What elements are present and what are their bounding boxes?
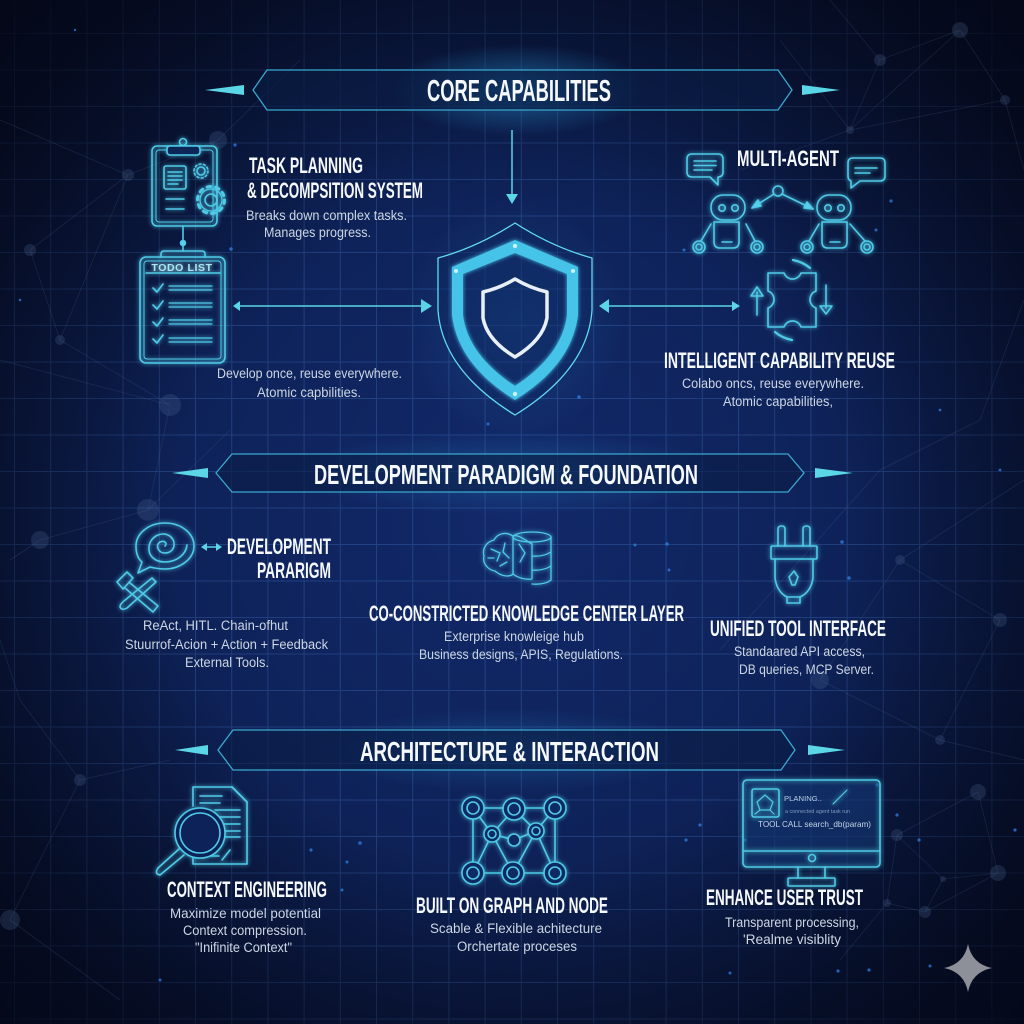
panel: multi-agent and capability reuse — [664, 146, 895, 409]
section header: Core Capabilities: CORE CAPABILITIES — [427, 73, 611, 108]
section header: Development Paradigm & Foundation: DEVELOPMENT PARADIGM & FOUNDATION — [314, 459, 698, 490]
text: paradigm description line 1: ReAct, HITL. Chain-ofhut — [143, 618, 288, 633]
icon: monitor — [743, 780, 880, 886]
section header: Architecture & Interaction — [175, 708, 845, 792]
text: reuse description line 1: Colabo oncs, reuse everywhere. — [682, 376, 864, 391]
text: reuse description line 2: Atomic capabilities, — [723, 394, 833, 409]
text: trust description line 2: 'Realme visiblity — [743, 932, 841, 947]
icon: two robots — [687, 154, 885, 253]
text: paradigm description line 2: Stuurrof-Acion + Action + Feedback — [125, 637, 328, 652]
heading: context engineering: CONTEXT ENGINEERING — [167, 877, 327, 902]
icon: planning clipboard — [152, 138, 224, 226]
icon: document and magnifier — [156, 787, 247, 875]
arrow: paradigm double arrow — [201, 543, 222, 551]
heading: unified tool interface: UNIFIED TOOL INTERFACE — [710, 616, 886, 641]
text: task description line 2: Manages progress. — [264, 225, 371, 240]
heading: intelligent capability reuse: INTELLIGENT CAPABILITY REUSE — [664, 348, 895, 373]
panel: user trust — [706, 780, 880, 947]
text: context description line 1: Maximize model potential — [170, 906, 321, 921]
arrow: header down to shield — [506, 130, 518, 204]
heading: decomposition system: & DECOMPSITION SYSTEM — [247, 178, 423, 203]
icon: central shield — [405, 200, 625, 440]
text: tool description line 1: Standaared API access, — [734, 644, 865, 659]
icon: todo list: TODO LIST — [151, 262, 213, 274]
heading: enhance user trust: ENHANCE USER TRUST — [706, 885, 863, 910]
heading: paradigm: PARARIGM — [257, 558, 331, 583]
heading: built on graph and node: BUILT ON GRAPH AND NODE — [416, 893, 608, 918]
text: reuse note line 1: Develop once, reuse everywhere. — [217, 366, 402, 381]
icon: todo list — [140, 251, 225, 363]
icon: puzzle piece with cycle arrows — [751, 260, 832, 340]
panel: task planning — [140, 138, 423, 400]
heading: knowledge center layer: CO-CONSTRICTED KNOWLEDGE CENTER LAYER — [369, 601, 684, 626]
panel: context engineering — [156, 787, 327, 955]
icon: monitor: TOOL CALL search_db(param) — [758, 819, 871, 829]
text: knowledge description line 1: Exterprise knowleige hub — [444, 629, 584, 644]
icon: monitor: PLANING.. — [784, 794, 822, 803]
icon: monitor: a connected agent task run — [785, 809, 850, 815]
panel: development paradigm — [117, 523, 331, 670]
icon: spiral bubble and tools — [117, 523, 194, 612]
heading: development: DEVELOPMENT — [227, 534, 331, 559]
text: graph description line 2: Orchertate proceses — [457, 939, 577, 954]
section header: Development Paradigm & Foundation — [172, 431, 853, 515]
heading: multi-agent: MULTI-AGENT — [737, 146, 839, 171]
panel: graph and node — [416, 797, 608, 954]
icon: plug — [771, 526, 817, 603]
text: context description line 2: Context compression. — [183, 923, 307, 938]
section header: Architecture & Interaction: ARCHITECTURE & INTERACTION — [360, 736, 659, 767]
text: context description line 3: "Inifinite Context" — [195, 940, 292, 955]
arrow: todo to shield — [233, 299, 432, 313]
icon: brain and database — [483, 532, 551, 584]
text: trust description line 1: Transparent processing, — [725, 915, 859, 930]
panel: knowledge center — [369, 532, 684, 662]
heading: task planning: TASK PLANNING — [249, 153, 363, 178]
icon: sparkle watermark — [944, 944, 992, 992]
icon: connector — [180, 226, 186, 251]
arrow: shield to capability reuse — [599, 299, 740, 313]
text: knowledge description line 2: Business designs, APIS, Regulations. — [419, 647, 623, 662]
text: paradigm description line 3: External Tools. — [185, 655, 269, 670]
icon: node graph — [462, 797, 566, 884]
text: reuse note line 2: Atomic capbilities. — [257, 385, 361, 400]
text: graph description line 1: Scable & Flexible achitecture — [430, 921, 602, 936]
section header: Core Capabilities — [205, 44, 840, 136]
text: task description line 1: Breaks down complex tasks. — [246, 208, 407, 223]
panel: unified tool interface — [710, 526, 886, 677]
text: tool description line 2: DB queries, MCP Server. — [739, 662, 874, 677]
